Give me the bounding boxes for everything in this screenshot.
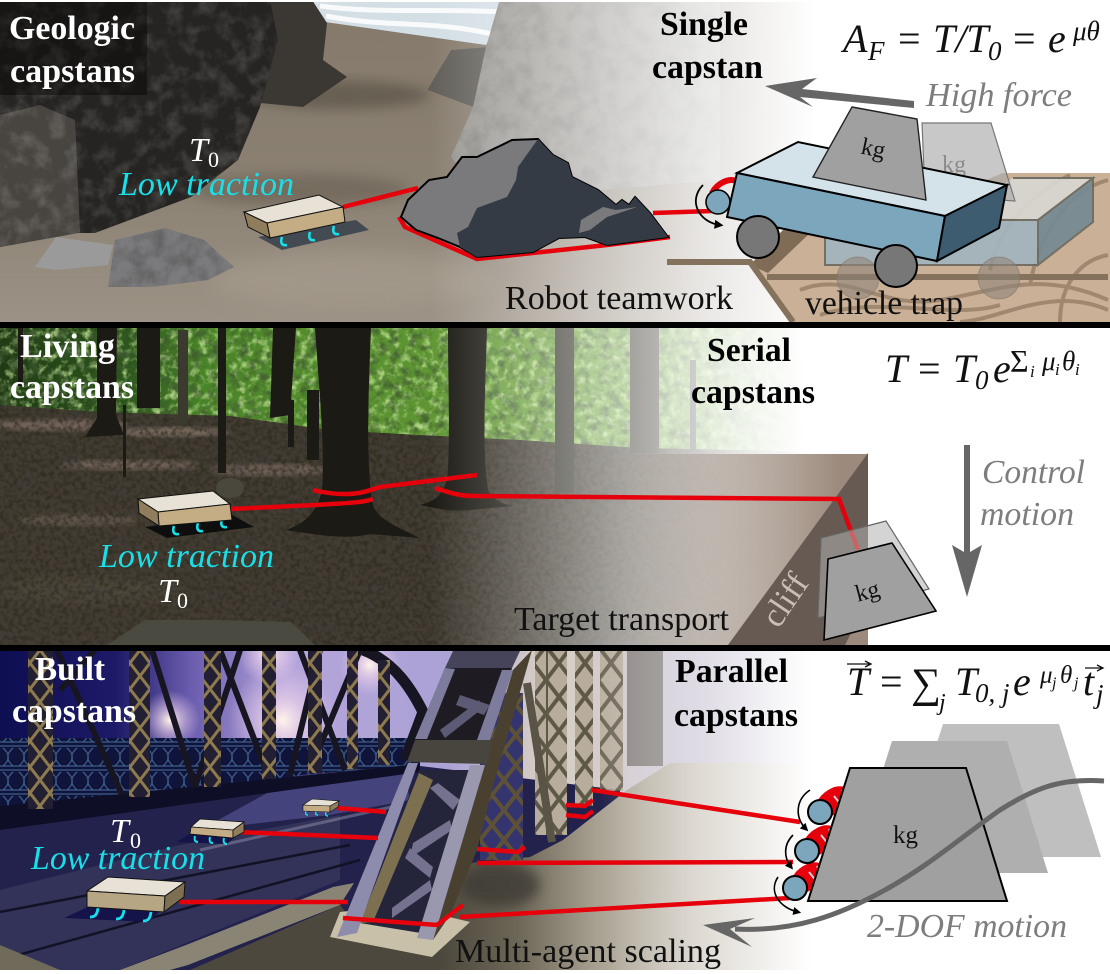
heading: parallel capstans: capstans xyxy=(674,697,798,734)
label: T0 tension: 0 xyxy=(177,588,188,613)
tethers: parallel red cables xyxy=(179,790,800,925)
icon: vehicle with capstan: kg xyxy=(859,134,888,164)
formula: serial capstans: i xyxy=(1030,362,1035,381)
heading: geologic capstans: capstans xyxy=(10,53,135,90)
heading: parallel capstans xyxy=(674,653,798,734)
formula: single capstan amplification: T/T xyxy=(933,16,991,61)
formula: parallel capstans: T xyxy=(955,659,980,704)
icon: capstans on weight xyxy=(774,780,855,912)
formula: single capstan amplification: = xyxy=(1013,16,1036,61)
formula: serial capstans: 0 xyxy=(975,365,989,395)
formula: serial capstans: μ xyxy=(1041,346,1056,376)
label: T0 tension xyxy=(189,132,219,172)
icon: main kg weight xyxy=(808,768,1007,901)
label: target transport: Target transport xyxy=(514,601,730,638)
label: low traction: Low traction xyxy=(30,840,205,877)
label: low traction: Low traction xyxy=(98,538,274,575)
photo: forest xyxy=(0,328,784,645)
formula: parallel capstans: 0, j xyxy=(975,678,1010,708)
formula: single capstan amplification: e xyxy=(1048,16,1066,61)
formula: parallel capstans: j xyxy=(1050,675,1057,692)
divider bar two xyxy=(0,645,1110,651)
formula: single capstan amplification: μθ xyxy=(1072,16,1100,46)
formula: serial capstans: T xyxy=(885,346,910,391)
heading: parallel capstans: Parallel xyxy=(675,653,788,690)
tether: red cable around trees xyxy=(230,475,858,550)
heading: serial capstans: capstans xyxy=(691,374,815,411)
tether: red cable around rock xyxy=(343,188,712,259)
formula: single capstan amplification xyxy=(840,16,1100,66)
formula: serial capstans: Σ xyxy=(1010,343,1029,379)
heading: built capstans xyxy=(12,651,136,730)
label: 2-DOF motion: 2-DOF motion xyxy=(867,908,1067,945)
heading: living capstans: Living xyxy=(20,328,115,365)
icon: robot-climbed rock xyxy=(401,139,668,257)
formula: parallel capstans: θ xyxy=(1060,662,1072,689)
icon: hanging kg weight xyxy=(818,521,936,640)
label: multi-agent scaling: Multi-agent scaling xyxy=(455,933,721,970)
icon: vehicle with capstan xyxy=(696,107,1007,287)
icon: ghost kg weight xyxy=(922,123,1015,201)
sidewalk and curb xyxy=(190,763,830,970)
heading: geologic capstans: Geologic xyxy=(9,10,135,47)
label: control motion: motion xyxy=(980,496,1074,533)
label: T0 tension xyxy=(158,573,188,613)
heading: living capstans: capstans xyxy=(10,369,134,406)
formula: parallel capstans: μ xyxy=(1039,662,1053,689)
formula: parallel capstans: t xyxy=(1083,659,1095,704)
arrow: control motion xyxy=(952,445,982,597)
label: T0 tension: T xyxy=(110,813,131,850)
label: T0 tension: 0 xyxy=(130,828,141,853)
label: T0 tension: T xyxy=(189,132,210,169)
formula: single capstan amplification: 0 xyxy=(988,36,1002,66)
label: cliff: cliff xyxy=(754,566,817,634)
arrow: high force xyxy=(765,78,914,108)
heading: serial capstans xyxy=(691,332,815,411)
formula: single capstan amplification: = xyxy=(898,16,921,61)
formula: serial capstans xyxy=(885,343,1080,395)
panel: built capstans xyxy=(0,625,1104,970)
label: control motion xyxy=(980,454,1085,533)
formula: serial capstans: i xyxy=(1055,360,1060,379)
photo: rocky beach xyxy=(0,0,830,322)
formula: parallel capstans: = xyxy=(880,659,903,704)
label: control motion: Control xyxy=(982,454,1085,491)
formula: single capstan amplification: F xyxy=(867,36,885,66)
label: low traction: Low traction xyxy=(118,166,294,203)
divider bar one xyxy=(0,322,1110,328)
heading: geologic capstans xyxy=(9,10,135,90)
formula: parallel capstans xyxy=(847,659,1104,716)
formula: parallel capstans: T xyxy=(847,659,872,704)
photo: truss bridge xyxy=(0,651,790,970)
label: T0 tension xyxy=(110,813,141,853)
icon: robot in forest xyxy=(138,491,254,538)
arrow: 2-DOF curved motion xyxy=(703,780,1104,947)
label: high force: High force xyxy=(925,77,1072,114)
formula: serial capstans: e xyxy=(993,346,1011,391)
formula: parallel capstans: e xyxy=(1013,659,1031,704)
far truss columns xyxy=(480,651,663,860)
icon: small far robot xyxy=(303,799,339,816)
formula: parallel capstans: j xyxy=(936,690,946,716)
formula: serial capstans: T xyxy=(953,346,978,391)
icon: steel tower xyxy=(337,650,532,940)
heading: single capstan: Single xyxy=(660,6,748,43)
icon: main kg weight: kg xyxy=(893,822,918,849)
formula: parallel capstans: ∑ xyxy=(911,661,941,707)
icon: middle robot xyxy=(177,819,244,844)
diagram: vehicle trap xyxy=(667,173,1110,322)
diagram: ghost vehicle in trap xyxy=(825,178,1093,299)
label: T0 tension: 0 xyxy=(208,147,219,172)
icon: ghost kg weight: kg xyxy=(942,152,966,178)
formula: serial capstans: i xyxy=(1075,360,1080,379)
diagram: cliff xyxy=(645,453,868,645)
label: vehicle trap: vehicle trap xyxy=(805,285,963,322)
icon: robot on sand xyxy=(244,195,369,250)
heading: serial capstans: Serial xyxy=(707,332,791,369)
heading: living capstans xyxy=(10,328,134,406)
icon: ghost kg weights xyxy=(850,724,1101,873)
panel: living capstans xyxy=(0,328,1085,650)
formula: parallel capstans: j xyxy=(1072,675,1079,692)
heading: built capstans: Built xyxy=(35,651,106,688)
label: robot teamwork: Robot teamwork xyxy=(505,280,733,317)
panel: geologic capstans xyxy=(0,0,1110,322)
formula: serial capstans: = xyxy=(918,346,941,391)
heading: built capstans: capstans xyxy=(12,693,136,730)
heading: single capstan: capstan xyxy=(652,49,763,86)
formula: serial capstans: θ xyxy=(1062,346,1075,376)
icon: large near robot xyxy=(64,877,185,922)
formula: parallel capstans: j xyxy=(1093,679,1104,709)
heading: single capstan xyxy=(652,6,763,86)
icon: hanging kg weight: kg xyxy=(853,576,882,608)
formula: single capstan amplification: A xyxy=(840,16,868,61)
label: T0 tension: T xyxy=(158,573,179,610)
